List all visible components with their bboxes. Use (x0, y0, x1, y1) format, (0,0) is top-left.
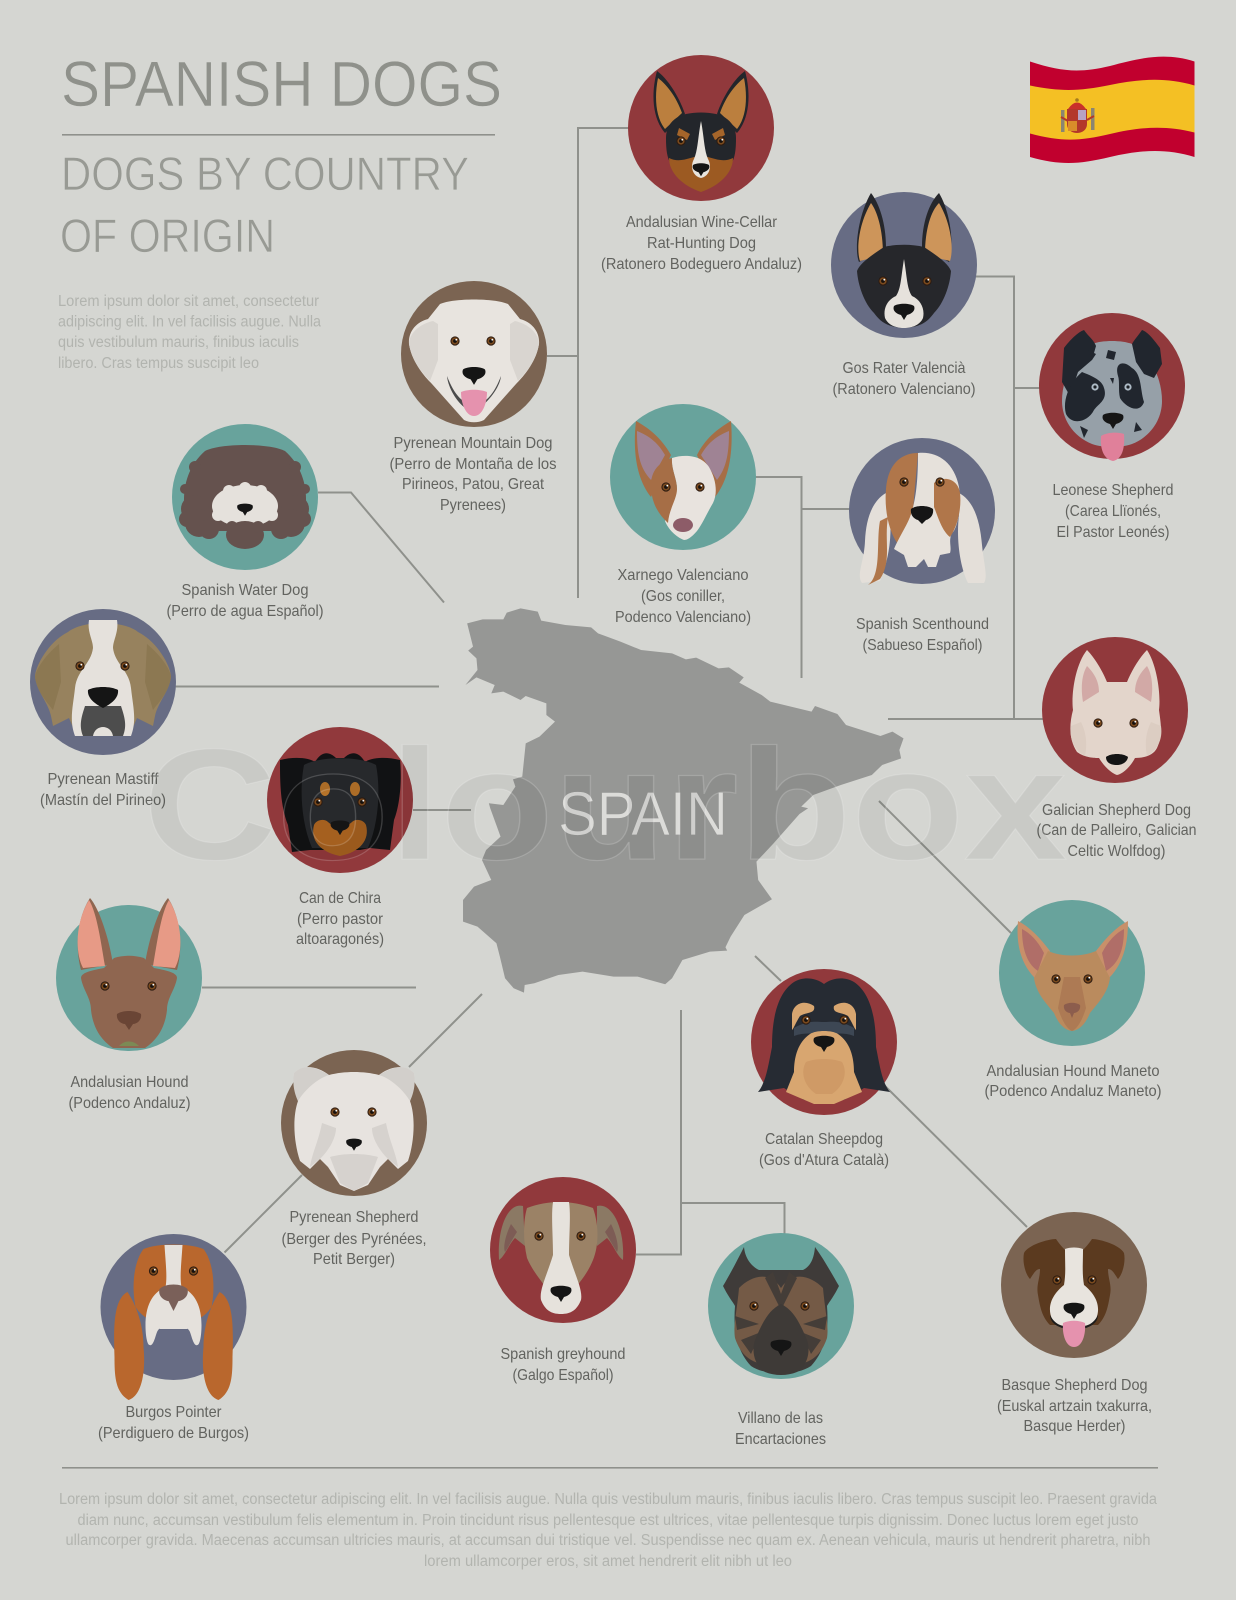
label: Spanish Scenthound: (Sabueso Español) (862, 637, 982, 654)
label: Galician Shepherd Dog: Celtic Wolfdog) (1068, 843, 1166, 860)
dog: Gos Rater Valencià (831, 192, 977, 338)
label: Spanish greyhound (500, 1346, 626, 1384)
label: Spanish Scenthound (856, 616, 989, 654)
header rule (62, 134, 495, 136)
label: Xarnego Valenciano: Podenco Valenciano) (615, 609, 751, 626)
label: Burgos Pointer: (Perdiguero de Burgos) (98, 1425, 249, 1442)
label: Spanish Water Dog: Spanish Water Dog (182, 582, 308, 599)
footer rule (62, 1467, 1158, 1469)
map label: SPAIN (558, 780, 728, 849)
label: Pyrenean Shepherd (282, 1209, 426, 1268)
label: Pyrenean Shepherd: Pyrenean Shepherd (290, 1209, 418, 1226)
label: Basque Shepherd Dog: (Euskal artzain txakurra, (997, 1398, 1152, 1415)
label: Pyrenean Mastiff: Pyrenean Mastiff (48, 771, 159, 788)
label: Can de Chira: (Perro pastor (297, 911, 384, 928)
label: Pyrenean Mountain Dog: Pyrenean Mountain Dog (394, 435, 552, 452)
label: Xarnego Valenciano: Xarnego Valenciano (618, 567, 749, 584)
dog: Pyrenean Mountain Dog (401, 281, 547, 427)
label: Gos Rater Valencià: Gos Rater Valencià (842, 360, 966, 377)
label: Villano de las Encartaciones (735, 1410, 826, 1448)
dog: Pyrenean Mastiff (30, 609, 176, 755)
label: Basque Shepherd Dog: Basque Shepherd Dog (1002, 1377, 1148, 1394)
footer paragraph (59, 1491, 1157, 1570)
dog: Basque Shepherd Dog (1001, 1212, 1147, 1358)
label: Andalusian Hound Maneto (984, 1063, 1162, 1100)
label: Leonese Shepherd: El Pastor Leonés) (1056, 524, 1170, 541)
label: Basque Shepherd Dog (997, 1377, 1152, 1435)
label: Andalusian Hound: Andalusian Hound (70, 1074, 188, 1091)
label: Villano de las Encartaciones: Encartaciones (735, 1431, 826, 1448)
dog: Burgos Pointer (100, 1234, 246, 1400)
label: Xarnego Valenciano (615, 567, 751, 626)
label: Pyrenean Shepherd: Petit Berger) (313, 1251, 395, 1268)
label: Spanish greyhound: Spanish greyhound (500, 1346, 626, 1363)
label: Leonese Shepherd: Leonese Shepherd (1052, 482, 1174, 499)
label: Xarnego Valenciano: (Gos coniller, (641, 588, 725, 605)
label: Catalan Sheepdog: (Gos d'Atura Català) (759, 1152, 889, 1169)
label: Galician Shepherd Dog (1036, 802, 1196, 860)
icon: Spanish flag (1030, 57, 1194, 163)
intro paragraph: libero. Cras tempus suscipit leo (58, 355, 259, 372)
subtitle: OF ORIGIN (60, 209, 275, 262)
connector lines (175, 128, 1043, 1254)
footer paragraph: diam nunc, accumsan vestibulum felis elementum in. Proin tincidunt risus pellentesque est ultrices, vitae pellentesque turpis dignissim. Donec luctus lorem eget justo (78, 1512, 1138, 1529)
label: Andalusian Hound (68, 1074, 190, 1112)
label: Pyrenean Mountain Dog: (Perro de Montaña de los (390, 456, 556, 473)
label: Spanish greyhound: (Galgo Español) (512, 1367, 614, 1384)
label: Andalusian Hound: (Podenco Andaluz) (68, 1095, 190, 1112)
intro paragraph: Lorem ipsum dolor sit amet, consectetur (58, 293, 319, 310)
label: Basque Shepherd Dog: Basque Herder) (1024, 1418, 1126, 1435)
label: Pyrenean Mountain Dog: Pyrenees) (440, 497, 506, 514)
label: Spanish Water Dog: (Perro de agua Español) (166, 603, 324, 620)
label: Andalusian Wine-Cellar Rat-Hunting Dog: (Ratonero Bodeguero Andaluz) (601, 256, 802, 273)
dog: Andalusian Hound (56, 898, 202, 1051)
map of Spain (463, 608, 904, 993)
dog: Can de Chira (267, 727, 413, 873)
label: Pyrenean Mountain Dog (390, 435, 556, 514)
dog: Pyrenean Shepherd (281, 1050, 427, 1196)
label: Villano de las Encartaciones: Villano de las (738, 1410, 823, 1427)
label: Catalan Sheepdog: Catalan Sheepdog (765, 1131, 883, 1148)
dog: Catalan Sheepdog (751, 969, 897, 1115)
label: Andalusian Hound Maneto: Andalusian Hound Maneto (986, 1063, 1160, 1080)
intro paragraph: quis vestibulum mauris, finibus iaculis (58, 334, 299, 351)
label: Pyrenean Shepherd: (Berger des Pyrénées, (282, 1231, 426, 1248)
label: Leonese Shepherd: (Carea Llïonés, (1065, 503, 1161, 520)
intro paragraph: adipiscing elit. In vel facilisis augue. Nulla (58, 314, 321, 330)
label: Andalusian Wine-Cellar Rat-Hunting Dog: Rat-Hunting Dog (647, 235, 756, 252)
dog: Villano de las Encartaciones (708, 1233, 854, 1379)
dog: Spanish Scenthound (849, 438, 995, 585)
dog: Andalusian Wine-Cellar Rat-Hunting Dog (628, 55, 774, 201)
label: Andalusian Wine-Cellar Rat-Hunting Dog (601, 214, 802, 273)
subtitle (60, 147, 469, 262)
dog: Galician Shepherd Dog (1042, 637, 1188, 783)
label: Andalusian Wine-Cellar Rat-Hunting Dog: Andalusian Wine-Cellar (626, 214, 778, 231)
label: Can de Chira: Can de Chira (299, 890, 381, 907)
dog: Andalusian Hound Maneto (999, 900, 1145, 1046)
watermark: Colourbox (143, 717, 1067, 893)
footer paragraph: ullamcorper gravida. Maecenas accumsan ultricies mauris, at accumsan dui tristique vel. Suspendisse nec quam ex. Aenean vehicula, mauris ut hendrerit pharetra, nibh (66, 1532, 1150, 1549)
dog: Leonese Shepherd (1039, 313, 1185, 461)
dog: Spanish greyhound (490, 1177, 636, 1323)
label: Spanish Scenthound: Spanish Scenthound (856, 616, 989, 633)
label: Can de Chira: altoaragonés) (296, 931, 384, 948)
label: Pyrenean Mountain Dog: Pirineos, Patou, Great (402, 476, 544, 493)
label: Gos Rater Valencià (832, 360, 976, 398)
label: Galician Shepherd Dog: Galician Shepherd Dog (1042, 802, 1191, 819)
label: Burgos Pointer: Burgos Pointer (126, 1404, 222, 1421)
label: Pyrenean Mastiff (40, 771, 166, 809)
label: Pyrenean Mastiff: (Mastín del Pirineo) (40, 792, 166, 809)
footer paragraph: Lorem ipsum dolor sit amet, consectetur adipiscing elit. In vel facilisis augue. Nulla quis vestibulum mauris, finibus iaculis libero. Cras tempus suscipit leo. Praesent gravida (59, 1491, 1157, 1508)
title: SPANISH DOGS (61, 48, 502, 120)
label: Galician Shepherd Dog: (Can de Palleiro, Galician (1036, 822, 1196, 839)
dog: Spanish Water Dog (172, 424, 318, 570)
intro paragraph (58, 293, 321, 372)
subtitle: DOGS BY COUNTRY (61, 147, 469, 200)
dog: Xarnego Valenciano (610, 404, 756, 550)
label: Can de Chira (296, 890, 384, 948)
label: Leonese Shepherd (1052, 482, 1174, 541)
footer paragraph: lorem ullamcorper eros, sit amet hendrerit elit nibh ut leo (424, 1553, 792, 1570)
label: Gos Rater Valencià: (Ratonero Valenciano) (832, 381, 976, 398)
label: Spanish Water Dog (166, 582, 324, 620)
label: Burgos Pointer (98, 1404, 249, 1442)
label: Andalusian Hound Maneto: (Podenco Andaluz Maneto) (984, 1083, 1162, 1100)
label: Catalan Sheepdog (759, 1131, 889, 1169)
